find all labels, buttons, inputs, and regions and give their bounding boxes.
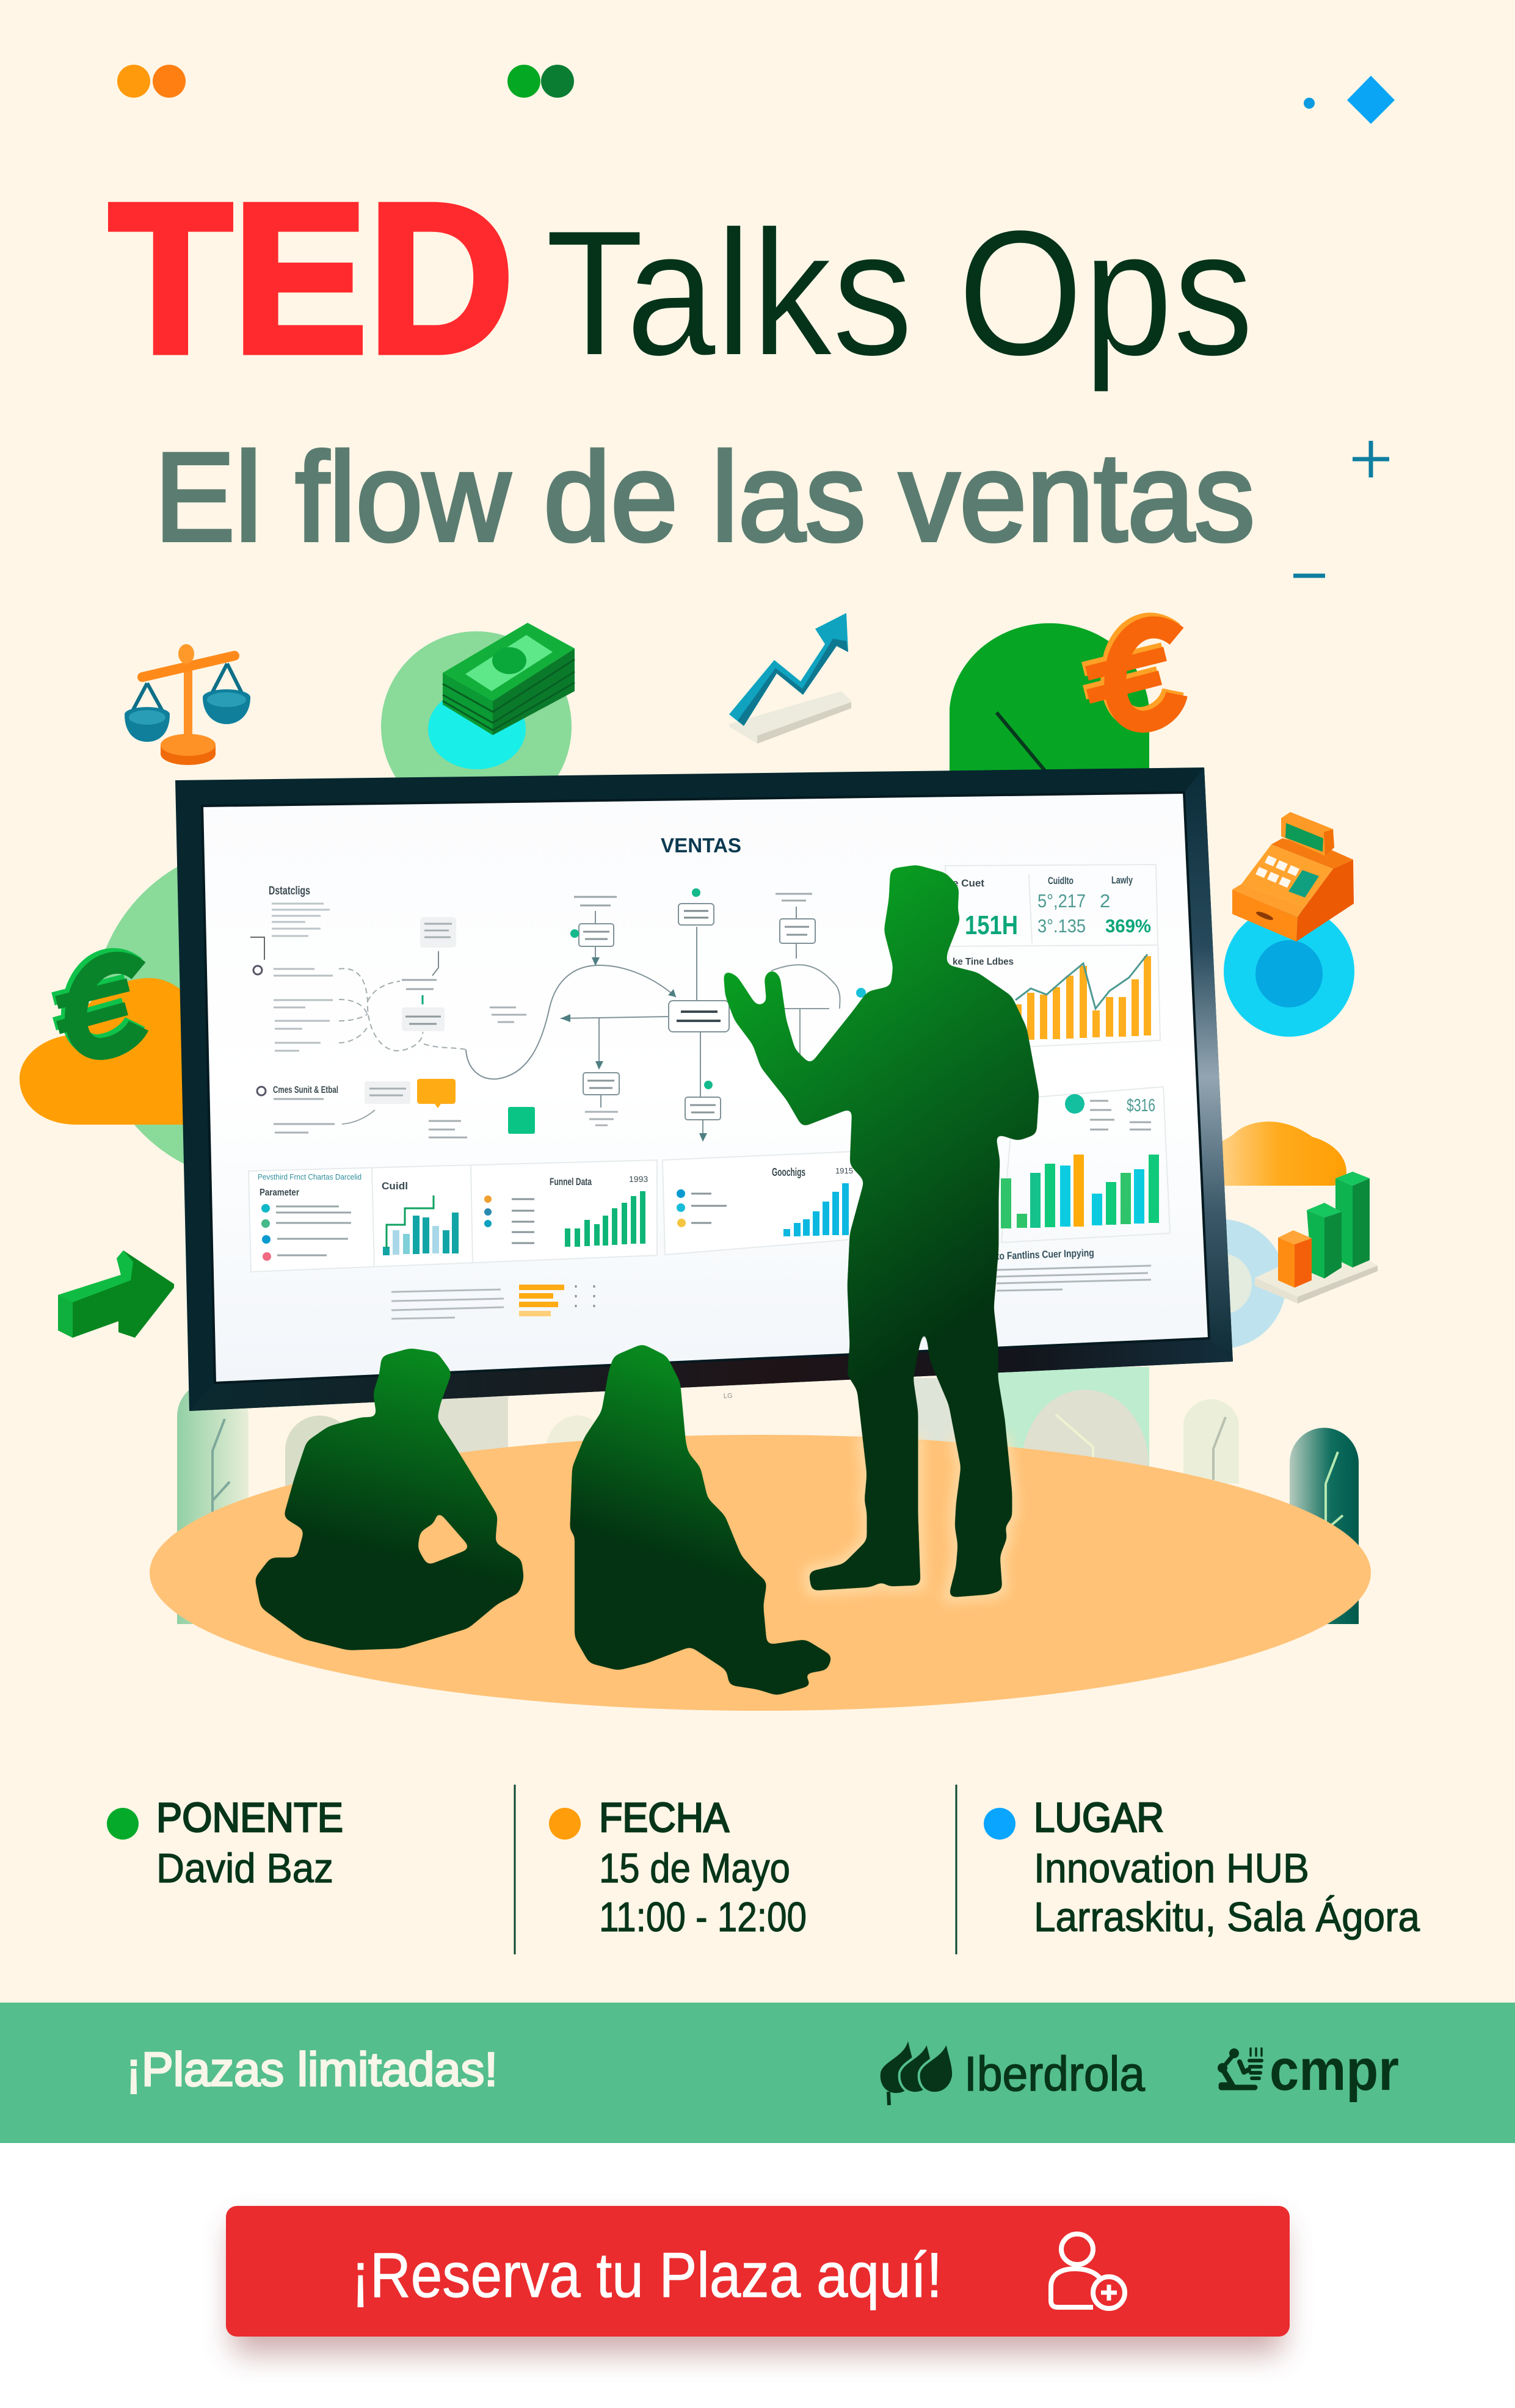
stage: orange ellipse — [150, 1435, 1371, 1711]
decoration: blue diamond — [1347, 76, 1395, 124]
green banner — [0, 2003, 1515, 2143]
panel tabs: Pevsthird Frnct Chartas Darcelid — [258, 1172, 361, 1181]
background shape: pale blue ring — [1157, 1219, 1286, 1349]
divider — [955, 1785, 957, 1954]
logo: Iberdrola wordmark: Iberdrola — [964, 2047, 1145, 2101]
icon: orange euro — [1083, 624, 1177, 722]
heading PONENTE: PONENTE — [156, 1794, 343, 1841]
icon: stack of money — [443, 623, 575, 735]
KPI label Lawly: Lawly — [1111, 874, 1133, 886]
screen heading: VENTAS: VENTAS — [661, 834, 741, 857]
heading LUGAR: LUGAR — [1034, 1794, 1164, 1841]
info column: fecha — [549, 1794, 807, 1940]
green bars — [565, 1191, 645, 1247]
icon: cash register — [1232, 812, 1354, 941]
screen: orange bar chart — [1014, 954, 1151, 1040]
KPI value 3 135: 3°.135 — [1037, 915, 1086, 937]
KPI value 151H: 151H — [965, 910, 1018, 940]
subtitle: El flow de las ventas: El flow de las ventas — [154, 427, 1255, 567]
monitor maker label: LG — [724, 1392, 733, 1400]
KPI label Cuidlto: Cuidlto — [1048, 875, 1074, 887]
decoration: blue dot — [1304, 98, 1315, 109]
silhouette: seated person left — [255, 1348, 524, 1650]
decoration: orange dots — [117, 65, 186, 98]
screen: flow diagram — [250, 885, 866, 1142]
background shape: green arch — [950, 623, 1149, 775]
KPI heading: e Cuet — [953, 877, 984, 889]
KPI chart title: ke Tine Ldbes — [953, 957, 1014, 967]
silhouette: standing presenter — [725, 866, 1037, 1596]
value 316: $316 — [1127, 1096, 1155, 1115]
icon: green 3D arrow — [58, 1250, 174, 1338]
chart title Cuidl: Cuidl — [382, 1180, 408, 1192]
date: 15 de Mayo — [599, 1845, 790, 1891]
screen: KPI panel — [945, 865, 1160, 1050]
button label: ¡Reserva tu Plaza aquí! — [351, 2240, 942, 2311]
screen: bottom left dashboard panel — [249, 1160, 657, 1272]
title: TED: TED — [109, 159, 514, 398]
silhouette: seated person right — [570, 1344, 832, 1695]
call to action button — [226, 2206, 1290, 2337]
background shape: cyan ring right — [1224, 906, 1354, 1037]
silhouette glow around standing man's legs — [810, 1435, 1011, 1596]
background shape: orange cloud left — [20, 978, 195, 1125]
banner text: ¡Plazas limitadas! — [126, 2042, 498, 2096]
chart title Funnel Data: Funnel Data — [550, 1176, 592, 1188]
speaker name: David Baz — [156, 1845, 333, 1891]
icon: 3D green and orange bar chart — [1255, 1172, 1378, 1304]
background shape: orange cloud right — [1197, 1122, 1346, 1186]
background plants row — [177, 1367, 1359, 1624]
bullet green — [107, 1808, 139, 1840]
background shape: big light green circle left — [93, 844, 432, 1183]
icon: teal rising arrow — [729, 613, 851, 744]
title: Talks Ops: Talks Ops — [545, 194, 1254, 394]
diagram note text: Cmes Sunit & Etbal — [273, 1085, 338, 1095]
icon: add user — [1051, 2234, 1125, 2308]
monitor screen — [202, 792, 1209, 1383]
cyan bars — [783, 1183, 849, 1236]
icon: green euro — [53, 959, 139, 1049]
divider — [514, 1785, 515, 1954]
venue: Innovation HUB — [1034, 1845, 1309, 1891]
screen: bottom text and orange bars — [391, 1285, 594, 1319]
chart year: 1915 — [835, 1166, 853, 1175]
heading FECHA: FECHA — [599, 1794, 730, 1841]
chart year: 1993 — [629, 1174, 648, 1184]
screen: green and cyan bar chart — [1001, 1155, 1159, 1228]
time: 11:00 - 12:00 — [599, 1894, 807, 1940]
icon: balance scale — [125, 644, 250, 765]
room: Larraskitu, Sala Ágora — [1034, 1894, 1420, 1940]
screen: lower right panel with dial and value — [1001, 1087, 1170, 1242]
info column: ponente — [107, 1794, 343, 1891]
KPI value 2: 2 — [1100, 890, 1110, 912]
info column: lugar — [984, 1794, 1420, 1940]
monitor frame — [175, 767, 1233, 1411]
screen: footer text block: to Fantlins Cuer Inpying — [996, 1247, 1094, 1262]
diagram note heading: Dstatcligs — [269, 885, 310, 898]
small bar chart with step line — [383, 1195, 459, 1255]
KPI value 5 217: 5°,217 — [1037, 890, 1086, 912]
decoration: green dots — [507, 65, 574, 98]
decoration: minus sign — [1293, 574, 1325, 578]
screen: middle dashboard panel — [663, 1151, 867, 1255]
panel heading Parameter: Parameter — [260, 1188, 299, 1198]
chart title Gusto: Goochigs — [772, 1166, 805, 1178]
logo: Iberdrola leaves — [881, 2041, 953, 2105]
bullet blue — [984, 1808, 1015, 1840]
background shape: green circle behind money — [381, 631, 572, 822]
logo: cmpr wordmark: cmpr — [1270, 2037, 1399, 2103]
logo: cmpr icon — [1219, 2048, 1262, 2087]
background shape: cyan ellipse behind money — [428, 689, 526, 769]
button shadow — [232, 2222, 1284, 2354]
decoration: plus sign — [1353, 441, 1389, 477]
KPI value 369 percent: 369% — [1105, 915, 1151, 937]
bullet orange — [549, 1808, 581, 1840]
screen: footer text block — [996, 1247, 1151, 1291]
white footer background — [0, 2143, 1515, 2408]
